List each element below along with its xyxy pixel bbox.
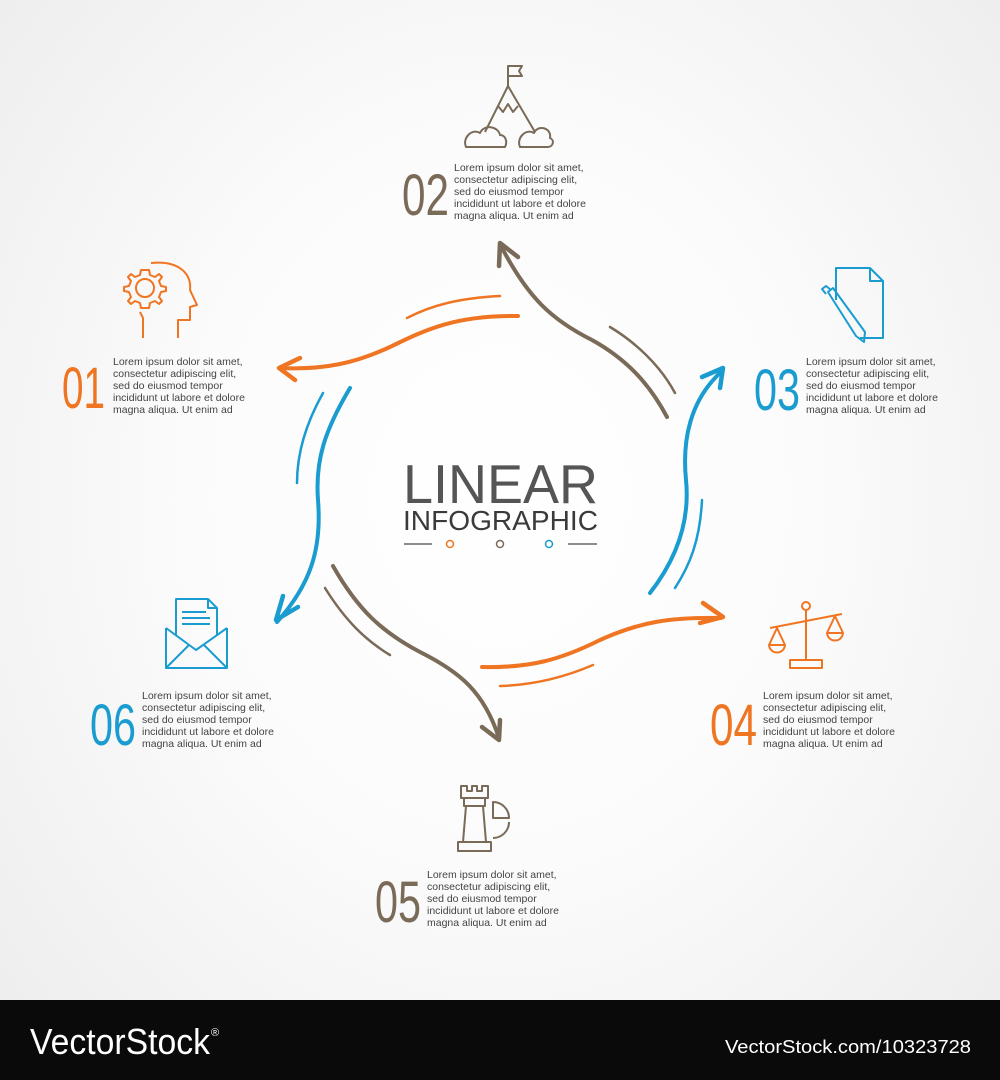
item 02: incididunt ut labore et dolore — [454, 198, 586, 210]
item 05: magna aliqua. Ut enim ad — [427, 917, 547, 929]
item 05: 05 — [375, 870, 421, 935]
item 04: Lorem ipsum dolor sit amet, — [763, 690, 893, 702]
item 06 — [90, 690, 274, 758]
item 01: 01 — [62, 356, 105, 421]
item 02: sed do eiusmod tempor — [454, 186, 564, 198]
item 03: consectetur adipiscing elit, — [806, 368, 929, 380]
arrow: brown to 05 — [325, 566, 500, 740]
item 03: 03 — [754, 358, 800, 423]
item 01: Lorem ipsum dolor sit amet, — [113, 356, 243, 368]
arrow: blue to 03 — [650, 368, 723, 593]
item 04 — [710, 690, 895, 758]
icon: scales (04) — [769, 602, 843, 668]
item 04: magna aliqua. Ut enim ad — [763, 738, 883, 750]
item 01: magna aliqua. Ut enim ad — [113, 404, 233, 416]
item 06: magna aliqua. Ut enim ad — [142, 738, 262, 750]
item 02: magna aliqua. Ut enim ad — [454, 210, 574, 222]
footer bar — [0, 1000, 1000, 1080]
arrow: brown to 02 — [499, 243, 675, 417]
item 03: incididunt ut labore et dolore — [806, 392, 938, 404]
item 04: consectetur adipiscing elit, — [763, 702, 886, 714]
item 05: Lorem ipsum dolor sit amet, — [427, 869, 557, 881]
item 04: incididunt ut labore et dolore — [763, 726, 895, 738]
item 06: sed do eiusmod tempor — [142, 714, 252, 726]
item 06: consectetur adipiscing elit, — [142, 702, 265, 714]
item 02 — [402, 162, 586, 228]
item 06: incididunt ut labore et dolore — [142, 726, 274, 738]
icon: mountain with flag (02) — [465, 66, 553, 147]
item 03: Lorem ipsum dolor sit amet, — [806, 356, 936, 368]
footer bar: VectorStock — [30, 1021, 211, 1062]
icon: document with pen (03) — [822, 268, 883, 342]
item 01: consectetur adipiscing elit, — [113, 368, 236, 380]
item 01 — [62, 356, 245, 421]
icon: chess rook with pie chart (05) — [458, 786, 509, 851]
item 06: Lorem ipsum dolor sit amet, — [142, 690, 272, 702]
item 05 — [375, 869, 559, 935]
item 06: 06 — [90, 693, 136, 758]
item 03: sed do eiusmod tempor — [806, 380, 916, 392]
arrow: orange to 04 — [482, 603, 723, 686]
item 02: consectetur adipiscing elit, — [454, 174, 577, 186]
item 03 — [754, 356, 938, 423]
arrow: orange to 01 — [279, 296, 518, 380]
title: INFOGRAPHIC — [403, 505, 598, 536]
icon: head with gear (01) — [124, 263, 197, 338]
item 01: sed do eiusmod tempor — [113, 380, 223, 392]
arrow: blue to 06 — [276, 388, 350, 622]
item 02: Lorem ipsum dolor sit amet, — [454, 162, 584, 174]
item 04: 04 — [710, 693, 757, 758]
item 05: consectetur adipiscing elit, — [427, 881, 550, 893]
item 03: magna aliqua. Ut enim ad — [806, 404, 926, 416]
footer bar: ® — [211, 1027, 219, 1039]
icon: envelope with letter (06) — [166, 599, 227, 668]
item 01: incididunt ut labore et dolore — [113, 392, 245, 404]
footer bar: VectorStock.com/10323728 — [725, 1037, 971, 1057]
title: LINEAR — [403, 453, 598, 515]
item 05: incididunt ut labore et dolore — [427, 905, 559, 917]
item 04: sed do eiusmod tempor — [763, 714, 873, 726]
item 05: sed do eiusmod tempor — [427, 893, 537, 905]
title — [403, 453, 598, 548]
item 02: 02 — [402, 163, 449, 228]
